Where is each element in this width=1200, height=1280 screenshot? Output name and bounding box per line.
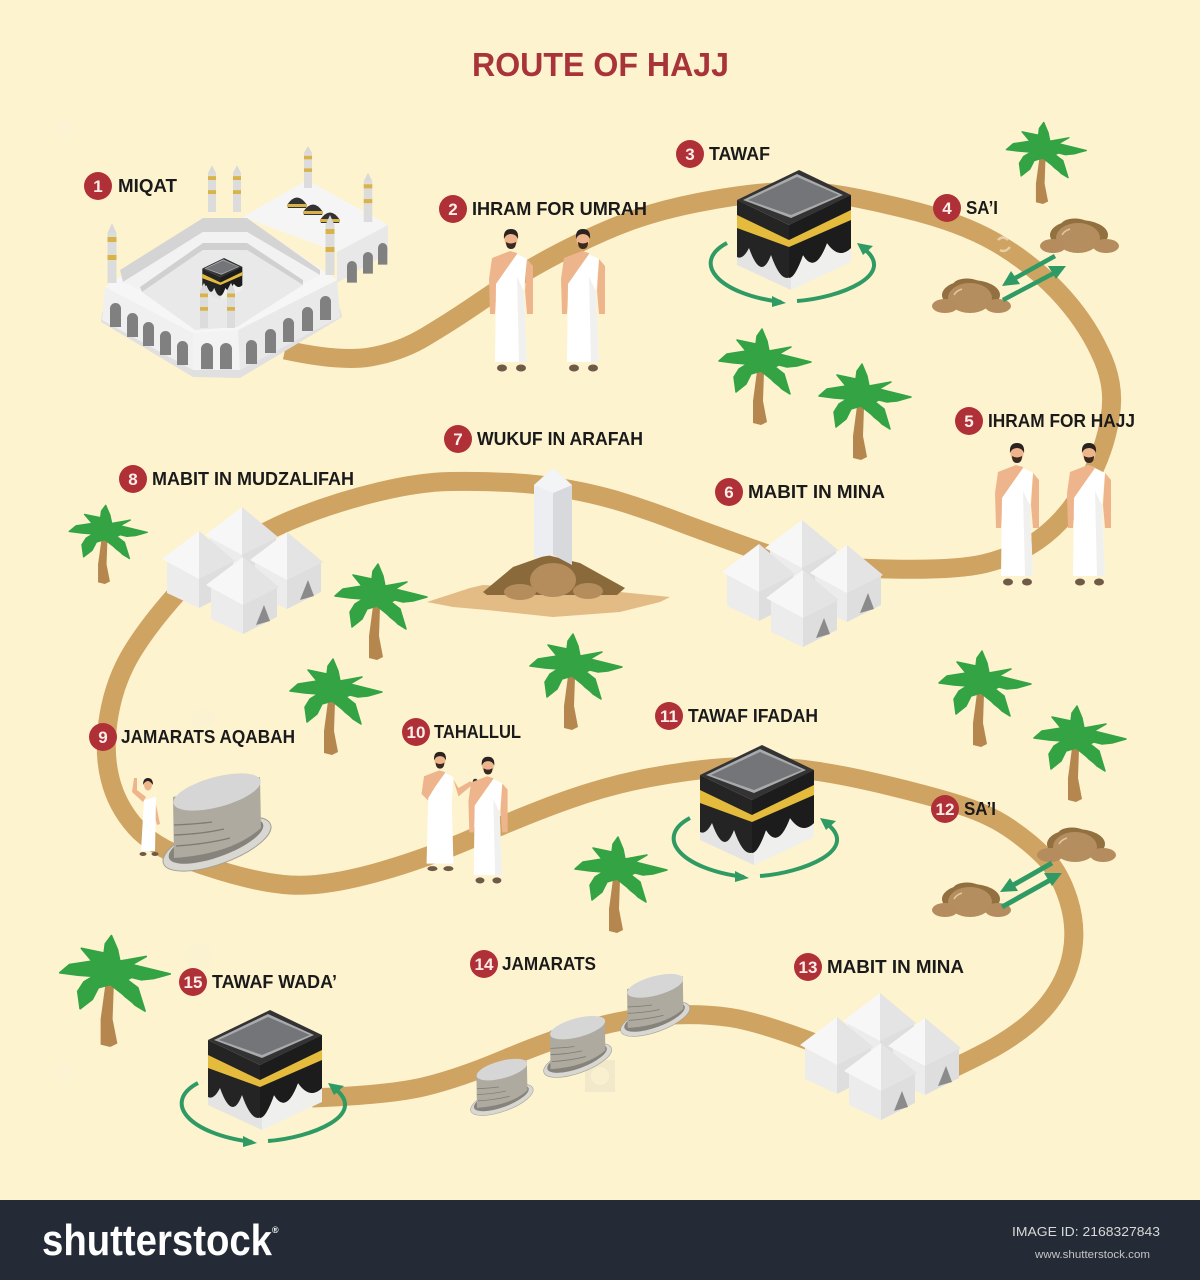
label 5 bbox=[955, 407, 1135, 435]
mini kaaba bbox=[202, 258, 242, 300]
label 1: 1 bbox=[93, 177, 103, 196]
label 8 bbox=[119, 465, 354, 493]
icon: pilgrims step 5 bbox=[995, 443, 1111, 586]
label 4: 4 bbox=[942, 199, 952, 218]
label 11 bbox=[655, 702, 818, 730]
label 6: 6 bbox=[724, 483, 734, 502]
label 7: 7 bbox=[453, 430, 463, 449]
icon: pilgrims step 2 bbox=[489, 229, 605, 372]
label 1: MIQAT bbox=[118, 176, 177, 196]
label 3: TAWAF bbox=[709, 144, 770, 164]
label 11: TAWAF IFADAH bbox=[688, 706, 818, 726]
icon: tents mudzalifah 8 bbox=[162, 507, 323, 634]
palm trees bbox=[60, 122, 1126, 1047]
label 7: WUKUF IN ARAFAH bbox=[477, 429, 643, 449]
label 15 bbox=[179, 968, 337, 996]
footer url: www.shutterstock.com bbox=[1034, 1249, 1150, 1261]
footer logo: shutterstock bbox=[42, 1216, 272, 1265]
footer image id: IMAGE ID: 2168327843 bbox=[1012, 1224, 1160, 1239]
label 10: 10 bbox=[407, 723, 425, 742]
icon: pilgrim throwing 9 bbox=[132, 778, 160, 856]
route path bbox=[106, 191, 1112, 1098]
label 9: JAMARATS AQABAH bbox=[121, 727, 295, 747]
label 9: 9 bbox=[98, 728, 108, 747]
footer bar bbox=[0, 1200, 1200, 1280]
label 5: 5 bbox=[964, 412, 974, 431]
label 14 bbox=[470, 950, 596, 978]
roof bbox=[105, 218, 337, 333]
label 7 bbox=[444, 425, 643, 453]
label 10 bbox=[402, 718, 521, 746]
icon: safa marwa rocks 4 bbox=[932, 218, 1119, 313]
icon: jamarat stone large bbox=[157, 766, 277, 882]
label 4 bbox=[933, 194, 998, 222]
label 11: 11 bbox=[660, 707, 678, 726]
icon: grand mosque bbox=[101, 146, 388, 378]
label 13: 13 bbox=[799, 958, 817, 977]
label 14: JAMARATS bbox=[502, 954, 596, 974]
label 2: IHRAM FOR UMRAH bbox=[472, 199, 647, 219]
faint watermark marks bbox=[53, 119, 1010, 1092]
label 1 bbox=[84, 172, 177, 200]
label 2 bbox=[439, 195, 647, 223]
label 14: 14 bbox=[475, 955, 494, 974]
label 2: 2 bbox=[448, 200, 458, 219]
label 9 bbox=[89, 723, 295, 751]
walls bbox=[102, 280, 340, 370]
label 15: TAWAF WADA’ bbox=[212, 972, 337, 992]
icon: jabal rahmah obelisk bbox=[427, 468, 670, 617]
icon: kaaba tawaf ifadah bbox=[674, 745, 837, 882]
icon: safa marwa rocks 12 bbox=[932, 828, 1116, 917]
label 8: 8 bbox=[128, 470, 138, 489]
minarets bbox=[108, 146, 372, 328]
label 6: MABIT IN MINA bbox=[748, 482, 885, 502]
label 12 bbox=[931, 795, 996, 823]
courtyard bbox=[120, 218, 320, 330]
label 12: 12 bbox=[936, 800, 954, 819]
label 3 bbox=[676, 140, 770, 168]
label 15: 15 bbox=[184, 973, 202, 992]
extension block bbox=[243, 180, 388, 283]
plinth bbox=[101, 308, 342, 378]
icon: tents mina 13 bbox=[800, 993, 961, 1120]
icon: tents mina 6 bbox=[722, 520, 883, 647]
label 13: MABIT IN MINA bbox=[827, 957, 964, 977]
icon: kaaba tawaf bbox=[711, 170, 874, 307]
footer registered mark: ® bbox=[272, 1225, 279, 1235]
label 13 bbox=[794, 953, 964, 981]
label 8: MABIT IN MUDZALIFAH bbox=[152, 469, 354, 489]
label 10: TAHALLUL bbox=[434, 722, 521, 742]
icon: tahallul pilgrims bbox=[422, 752, 508, 884]
label 6 bbox=[715, 478, 885, 506]
label 3: 3 bbox=[685, 145, 695, 164]
title: ROUTE OF HAJJ bbox=[472, 46, 729, 83]
icon: jamarat stones bbox=[467, 969, 694, 1122]
icon: kaaba tawaf wada bbox=[182, 1010, 345, 1147]
label 5: IHRAM FOR HAJJ bbox=[988, 411, 1135, 431]
label 12: SA’I bbox=[964, 799, 996, 819]
domes bbox=[287, 198, 340, 223]
label 4: SA’I bbox=[966, 198, 998, 218]
